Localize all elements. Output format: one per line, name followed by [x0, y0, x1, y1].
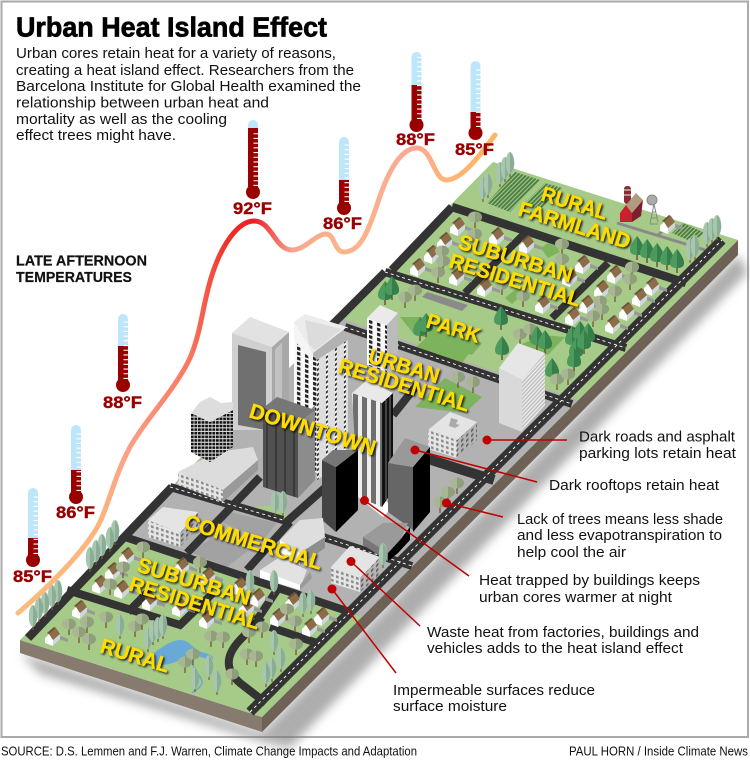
callout: waste heat: vehicles adds to the heat island effect	[427, 640, 684, 657]
intro text	[16, 45, 361, 144]
road markings	[170, 240, 722, 712]
label: commercial: COMMERCIAL	[182, 511, 325, 575]
commercial office left	[148, 507, 198, 547]
rear white tower	[367, 305, 398, 380]
intro text: creating a heat island effect. Researchers from the	[16, 62, 354, 79]
intro text: effect trees might have.	[16, 127, 176, 144]
thermometer 92F: 92°F	[233, 199, 272, 218]
office block lower	[331, 546, 380, 592]
source credit: SOURCE: D.S. Lemmen and F.J. Warren, Climate Change Impacts and Adaptation	[1, 744, 417, 758]
callout: trees: help cool the air	[517, 544, 626, 561]
callout: roads: Dark roads and asphalt	[579, 428, 736, 446]
white windowed tower	[294, 314, 348, 480]
thermometer 88F left	[103, 314, 142, 412]
tall grey tower	[232, 317, 289, 430]
callout: waste heat	[346, 557, 699, 657]
isometric city model	[20, 152, 748, 750]
podium	[178, 447, 258, 502]
callout: impermeable surfaces: Impermeable surfaces reduce	[393, 682, 595, 699]
intro text: mortality as well as the cooling	[16, 111, 227, 128]
windmill	[647, 195, 658, 224]
small grove	[271, 491, 287, 516]
callout: trapped heat: urban cores warmer at night	[479, 589, 673, 606]
farm fields	[487, 172, 705, 242]
thermometer 86F: 86°F	[56, 503, 95, 522]
callout: trees: and less evapotranspiration to	[517, 527, 722, 544]
thermometer 85F left	[13, 488, 52, 586]
label: suburban residential upper: SUBURBAN	[456, 231, 575, 287]
intro text: Barcelona Institute for Global Health examined the	[16, 78, 361, 95]
intro text: Urban cores retain heat for a variety of reasons,	[16, 45, 336, 62]
barn and silo	[620, 186, 643, 222]
thermometer 88F right: 88°F	[396, 130, 435, 149]
city-edge trees	[379, 478, 464, 568]
farm trees	[479, 152, 721, 273]
upper suburban trees	[431, 212, 639, 327]
callout: rooftops	[410, 446, 720, 494]
callout: trapped heat: Heat trapped by buildings keeps	[479, 572, 700, 589]
soft shadow under platform	[20, 255, 748, 750]
district labels	[98, 183, 633, 678]
label: suburban residential upper: RESIDENTIAL	[447, 250, 583, 312]
rural and suburban trees	[29, 520, 315, 695]
thermometer 86F	[56, 425, 95, 522]
label: park: PARK	[424, 310, 483, 348]
callout: impermeable surfaces	[328, 584, 595, 715]
thermometer 88F left: 88°F	[103, 393, 142, 412]
label: downtown: DOWNTOWN	[247, 400, 379, 460]
striped tall tower	[352, 380, 393, 517]
thermometer 85F left: 85°F	[13, 567, 52, 586]
callout: impermeable surfaces: surface moisture	[393, 698, 507, 715]
callout: rooftops: Dark rooftops retain heat	[549, 477, 720, 494]
callout: trapped heat	[360, 496, 700, 606]
callout: roads	[482, 428, 737, 462]
park patches	[253, 240, 565, 521]
commercial low buildings	[260, 518, 325, 590]
chart heading	[16, 254, 147, 286]
stepped low building	[363, 523, 410, 561]
callout: trees	[442, 498, 723, 561]
black front tower	[322, 450, 358, 532]
green ground	[20, 162, 738, 717]
temperature curve	[18, 135, 495, 613]
parking squares	[190, 512, 277, 567]
thermometer 86F centre	[323, 137, 362, 233]
thermometer 88F right	[396, 52, 435, 149]
farm lane	[617, 223, 705, 250]
label: suburban residential lower: SUBURBAN	[135, 554, 253, 610]
chart heading: LATE AFTERNOON	[16, 254, 147, 270]
dark right tower	[388, 438, 430, 532]
thermometer 86F centre: 86°F	[323, 214, 362, 233]
label: urban residential: RESIDENTIAL	[336, 355, 472, 417]
lower suburban houses	[45, 547, 337, 646]
black octagon tower	[191, 397, 233, 462]
roads	[28, 207, 722, 712]
intro text: relationship between urban heat and	[16, 94, 269, 112]
label: rural farmland: FARMLAND	[516, 198, 633, 254]
dark downtown tower	[263, 397, 315, 498]
callout: roads: parking lots retain heat	[579, 445, 737, 462]
label: suburban residential lower: RESIDENTIAL	[127, 573, 263, 634]
platform sides	[20, 240, 738, 732]
thermometer 85F right	[455, 61, 494, 159]
park parking lot	[422, 292, 468, 311]
office block upper	[428, 412, 477, 458]
grey city ground	[123, 318, 578, 617]
right white tower	[499, 343, 545, 432]
title: Urban Heat Island Effect	[16, 12, 327, 42]
label: rural farmland: RURAL	[539, 183, 610, 225]
callout: waste heat: Waste heat from factories, buildings and	[427, 624, 699, 641]
park trees	[378, 276, 595, 393]
callout: trees: Lack of trees means less shade	[517, 511, 723, 528]
label: rural: RURAL	[98, 635, 172, 678]
pond and stream	[151, 640, 213, 693]
chart heading: TEMPERATURES	[16, 270, 132, 286]
thermometer 92F	[233, 120, 272, 218]
upper suburban houses	[410, 215, 683, 334]
thermometer 85F right: 85°F	[455, 140, 494, 159]
label: urban residential: URBAN	[366, 345, 442, 388]
